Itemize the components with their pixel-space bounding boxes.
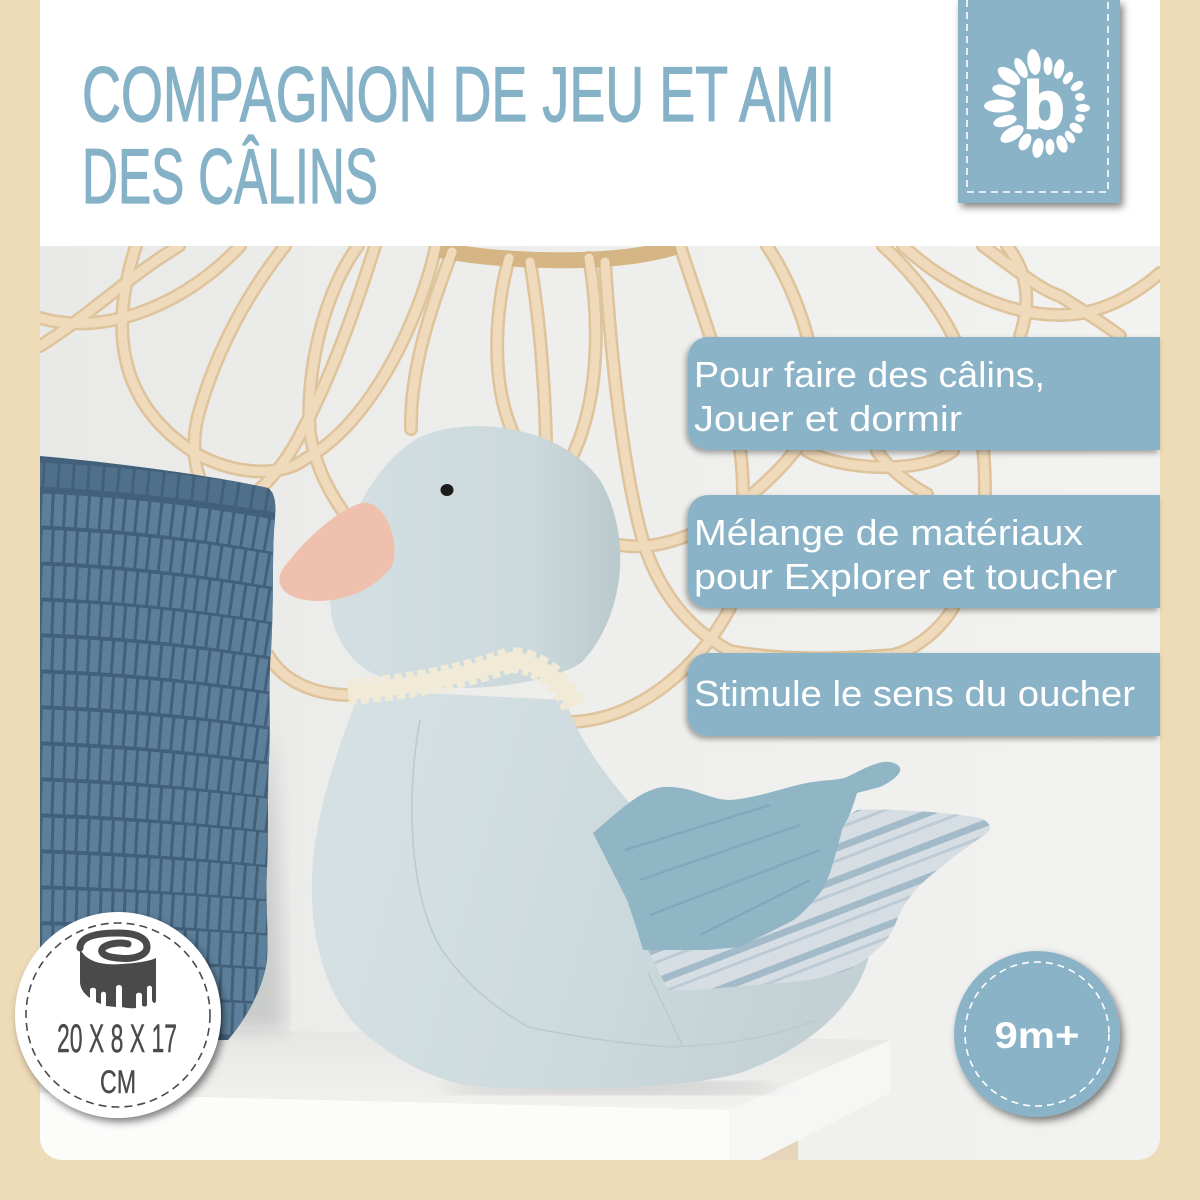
dimensions text	[57, 1017, 177, 1100]
plush duck	[279, 426, 990, 1094]
brand tag with logo	[958, 0, 1120, 203]
photo scene	[30, 246, 1160, 1160]
header panel	[40, 0, 1160, 246]
duck: eye	[440, 484, 454, 496]
white shelf	[40, 1030, 890, 1160]
size badge	[15, 912, 221, 1118]
dimensions text: 20 X 8 X 17	[57, 1017, 177, 1061]
title: DES CÂLINS	[82, 132, 378, 220]
duck: muslin wing	[593, 762, 900, 950]
duck: striped under wing	[648, 809, 990, 990]
title	[82, 50, 835, 220]
feature label 1	[688, 337, 1160, 450]
feature label 2	[688, 495, 1160, 608]
icon: flower logo	[984, 48, 1090, 159]
title: COMPAGNON DE JEU ET AMI	[82, 50, 835, 138]
duck: body	[312, 690, 875, 1089]
age badge	[954, 951, 1120, 1117]
age badge: 9m+	[994, 1015, 1080, 1056]
duck: beak	[279, 503, 395, 601]
duck: head	[330, 426, 620, 688]
knitted basket	[30, 450, 285, 1050]
feature label 3	[688, 653, 1160, 736]
icon: tape measure roll	[80, 933, 156, 1008]
feature label 2: Mélange de matériaux	[694, 512, 1083, 553]
duck: body seams	[411, 720, 773, 1048]
feature label 2: pour Explorer et toucher	[694, 556, 1117, 597]
duck: lace collar	[348, 660, 574, 706]
duck shadow on shelf	[440, 1082, 780, 1094]
dimensions text: CM	[100, 1064, 136, 1100]
wall	[40, 246, 1160, 1160]
icon: flower logo: b	[1024, 68, 1064, 142]
feature label 3: Stimule le sens du oucher	[694, 673, 1135, 714]
feature label 1: Jouer et dormir	[694, 398, 962, 439]
wicker wall decoration	[40, 246, 1160, 722]
feature label 1: Pour faire des câlins,	[694, 354, 1045, 395]
